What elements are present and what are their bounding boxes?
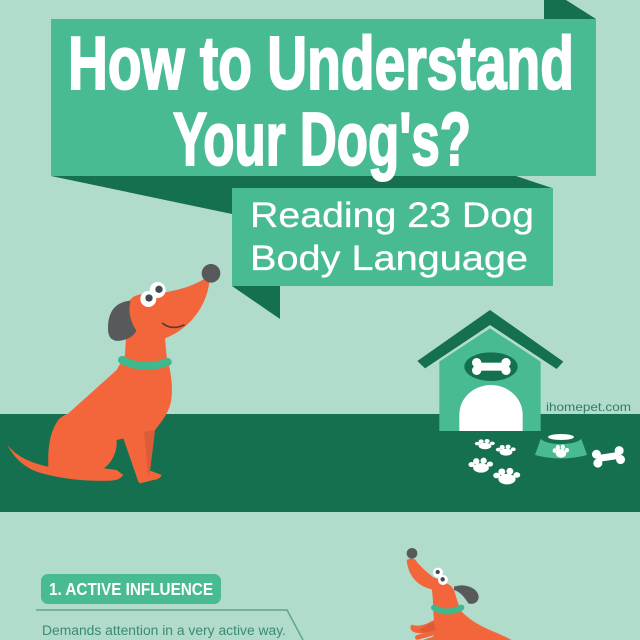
section divider xyxy=(36,610,303,640)
subtitle banner xyxy=(232,188,553,319)
nose xyxy=(202,264,220,283)
title: Your Dog's? xyxy=(173,97,471,181)
website label: ihomepet.com xyxy=(546,400,631,414)
paw prints xyxy=(468,439,520,484)
bone xyxy=(591,446,626,468)
ear xyxy=(454,585,479,604)
sitting dog xyxy=(7,264,220,483)
lower arm xyxy=(417,632,437,637)
title banner xyxy=(51,0,596,214)
section text: Demands attention in a very active way. xyxy=(42,623,286,638)
section label xyxy=(41,574,221,604)
section label: 1. ACTIVE INFLUENCE xyxy=(49,579,213,599)
eyes xyxy=(433,568,448,585)
collar xyxy=(122,360,168,366)
nose xyxy=(407,548,417,559)
eyes xyxy=(140,282,166,307)
collar xyxy=(434,608,461,611)
jumping dog xyxy=(407,548,512,640)
ear xyxy=(108,301,136,341)
subtitle: Reading 23 Dog xyxy=(250,196,534,235)
food bowl xyxy=(535,430,587,458)
ground xyxy=(0,414,640,512)
mouth xyxy=(163,323,184,327)
dog house xyxy=(417,310,563,431)
subtitle: Body Language xyxy=(250,239,528,278)
